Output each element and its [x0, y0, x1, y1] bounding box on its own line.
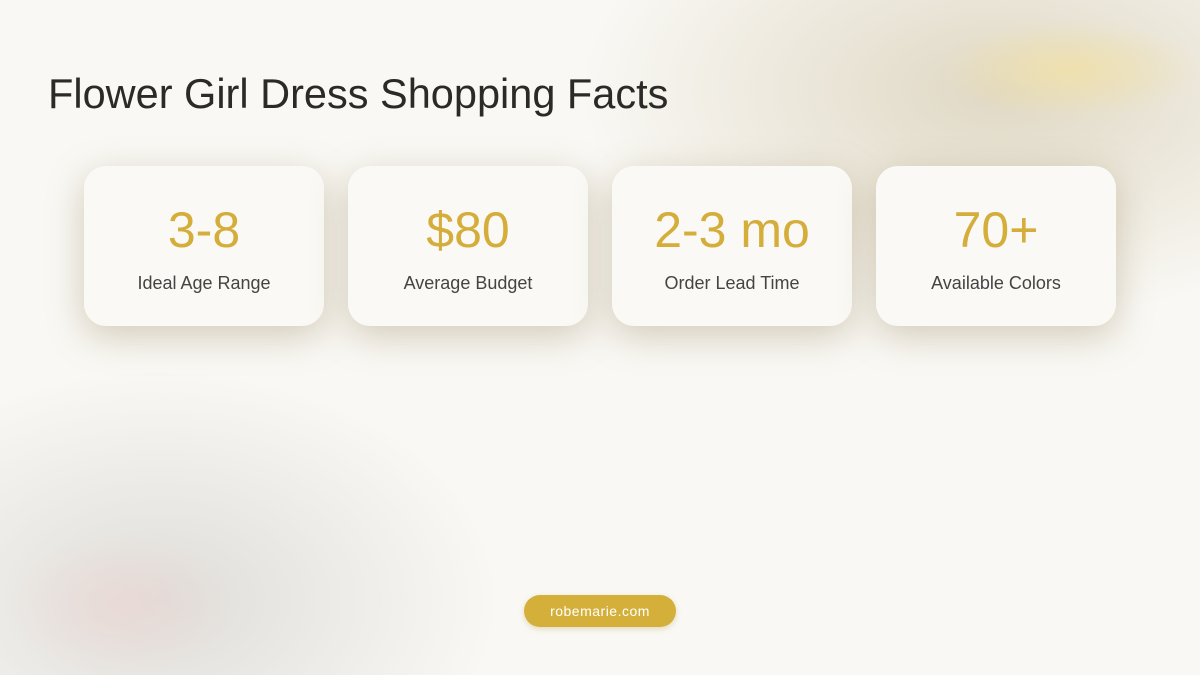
- number: 3-8: 3-8: [168, 202, 240, 258]
- number: 2-3 mo: 2-3 mo: [654, 202, 810, 258]
- label: budget: Average Budget: [404, 273, 532, 293]
- label: lead time: Order Lead Time: [664, 273, 800, 293]
- number: $80: $80: [426, 202, 510, 258]
- number: 70+: 70+: [954, 202, 1038, 258]
- footer pill: website: robemarie.com: [550, 603, 650, 619]
- title: Flower Girl Dress Shopping Facts: [48, 70, 668, 117]
- footer pill: website: [524, 595, 676, 627]
- label: age range: Ideal Age Range: [137, 273, 271, 293]
- card: age range: [84, 166, 324, 326]
- label: colors: Available Colors: [931, 273, 1061, 293]
- card: colors: [876, 166, 1116, 326]
- card: budget: [348, 166, 588, 326]
- card: lead time: [612, 166, 852, 326]
